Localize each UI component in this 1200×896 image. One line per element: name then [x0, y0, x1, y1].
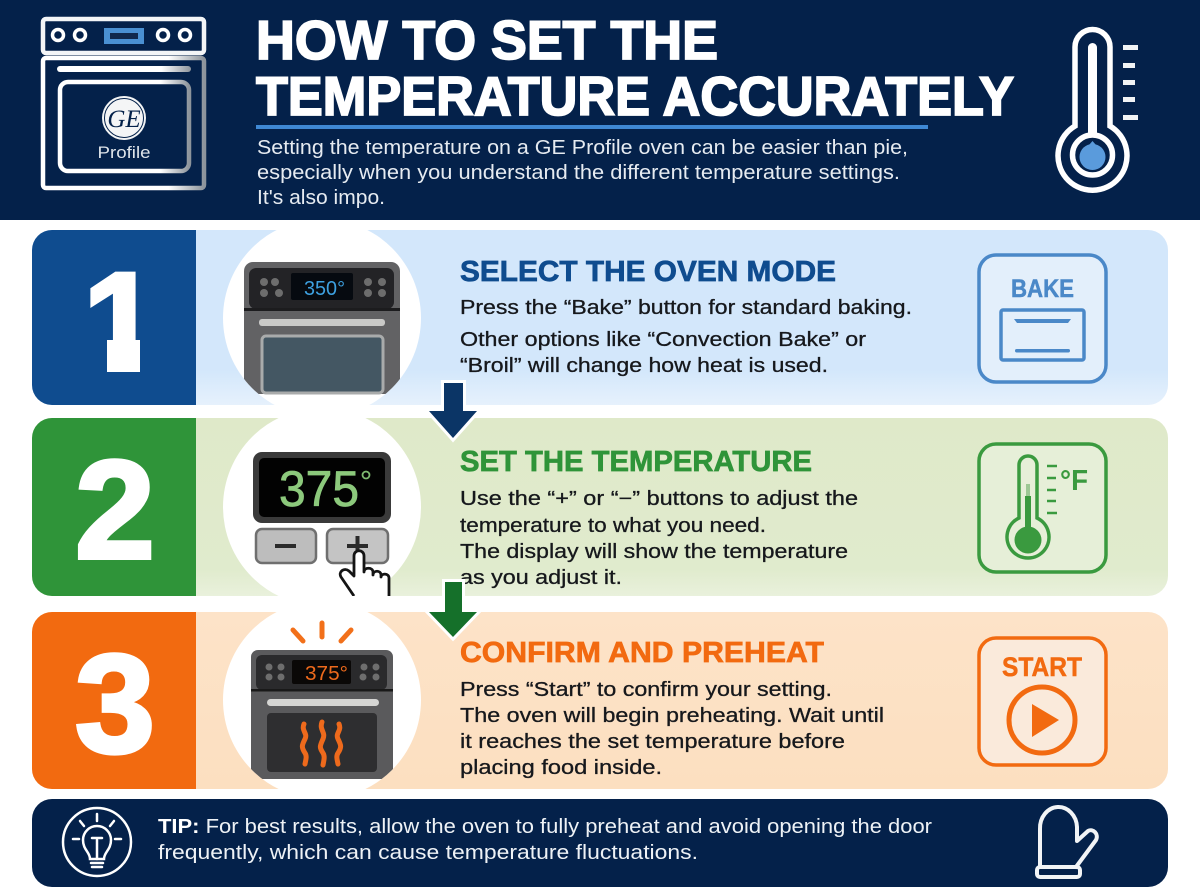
subtitle: Setting the temperature on a GE Profile oven can be easier than pie,	[257, 137, 908, 159]
step 2 text: The display will show the temperature	[460, 541, 848, 563]
illustration: oven showing 350	[244, 262, 400, 394]
step 2 text	[460, 446, 858, 589]
panel: step 1 select the oven mode	[32, 230, 1168, 405]
step 1 text: “Broil” will change how heat is used.	[460, 355, 828, 377]
step 3 text	[460, 637, 884, 779]
icon: oven with GE Profile logo: Profile	[98, 143, 150, 162]
illustration: temperature display and buttons: 375	[279, 461, 359, 517]
title	[256, 9, 1014, 127]
panel: tip	[32, 799, 1168, 887]
step 3 text: CONFIRM AND PREHEAT	[460, 637, 824, 669]
subtitle: especially when you understand the different temperature settings.	[257, 162, 900, 184]
icon: light bulb	[63, 808, 131, 876]
step 1 text: Press the “Bake” button for standard baking.	[460, 297, 912, 319]
panel: step 2 set the temperature	[32, 418, 1168, 596]
arrow: step 2 to step 3	[429, 582, 477, 637]
title: HOW TO SET THE	[256, 9, 718, 71]
step 2 text: as you adjust it.	[460, 567, 622, 589]
subtitle: It's also impo.	[257, 187, 385, 209]
icon: thermometer in Fahrenheit	[979, 444, 1106, 572]
illustration: preheating oven: 375°	[305, 663, 348, 685]
step number 1: 1	[83, 243, 159, 400]
tip text: frequently, which can cause temperature fluctuations.	[158, 842, 698, 864]
step 1 text	[460, 256, 912, 377]
step 3 text: placing food inside.	[460, 757, 662, 779]
panel: step 3 confirm and preheat	[32, 612, 1168, 789]
step 2 text: temperature to what you need.	[460, 515, 766, 537]
step 1 text: Other options like “Convection Bake” or	[460, 329, 866, 351]
step 1 text: SELECT THE OVEN MODE	[460, 256, 836, 288]
icon: bake button: BAKE	[1011, 275, 1074, 303]
step 2 text: Use the “+” or “−” buttons to adjust the	[460, 488, 858, 510]
icon: thermometer in Fahrenheit: °F	[1060, 465, 1088, 497]
icon: start button	[979, 638, 1106, 765]
icon: oven mitt	[1037, 807, 1097, 877]
arrow: step 1 to step 2	[429, 383, 477, 438]
tip text	[158, 816, 932, 864]
step 3 text: it reaches the set temperature before	[460, 731, 845, 753]
header banner	[0, 0, 1200, 220]
illustration: preheating oven	[251, 623, 393, 779]
step number 1	[90, 272, 140, 372]
icon: bake button	[979, 255, 1106, 382]
step number 3: 3	[75, 625, 155, 782]
illustration: oven showing 350: 350°	[304, 278, 345, 300]
tip text: TIP: For best results, allow the oven to fully preheat and avoid opening the door	[158, 816, 932, 838]
icon: oven with GE Profile logo	[43, 19, 204, 188]
step number 2: 2	[75, 431, 155, 588]
subtitle	[257, 137, 908, 209]
icon: thermometer	[1058, 30, 1138, 190]
illustration: temperature display and buttons	[253, 452, 391, 596]
step 3 text: The oven will begin preheating. Wait until	[460, 705, 884, 727]
icon: pointing hand	[340, 551, 389, 596]
title: TEMPERATURE ACCURATELY	[256, 65, 1014, 127]
icon: start button: START	[1002, 652, 1082, 682]
icon: oven with GE Profile logo: GE	[107, 106, 141, 133]
step 2 text: SET THE TEMPERATURE	[460, 446, 812, 478]
step 3 text: Press “Start” to confirm your setting.	[460, 679, 832, 701]
